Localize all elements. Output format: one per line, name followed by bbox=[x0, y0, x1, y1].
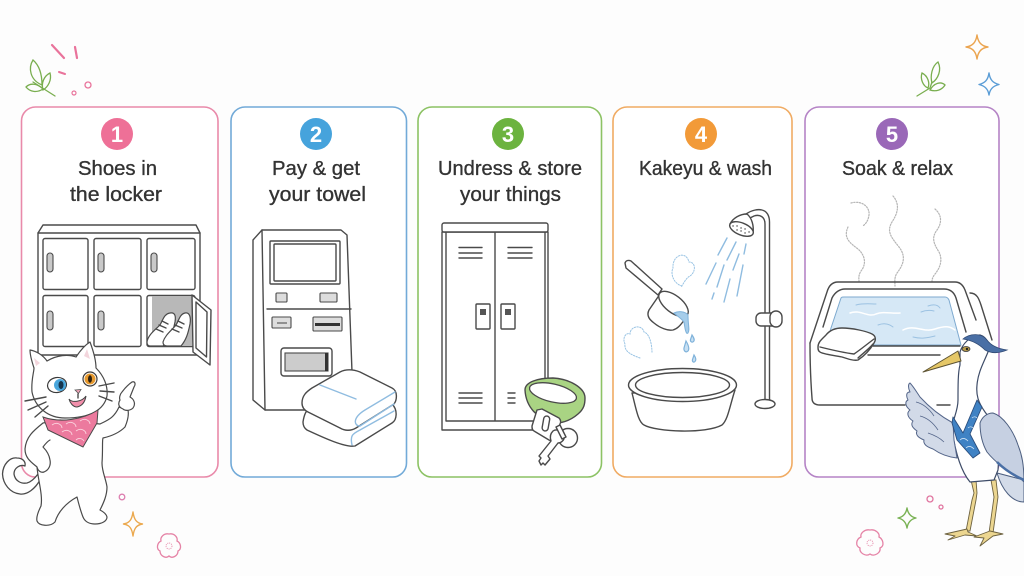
step number 5: 5 bbox=[886, 122, 898, 147]
cat body bbox=[25, 407, 128, 525]
illustration: folded towels bbox=[302, 370, 396, 446]
decoration: pink blossom right bbox=[857, 530, 883, 555]
towel on tub bbox=[818, 328, 875, 360]
heading: pay and get your towel: Pay & get bbox=[272, 157, 360, 180]
step number 5 bbox=[876, 118, 908, 150]
heron body and neck bbox=[952, 335, 998, 482]
heron feet bbox=[945, 529, 1003, 546]
illustration: wristband key bbox=[525, 378, 585, 465]
step number 2: 2 bbox=[310, 122, 322, 147]
illustration: clothes locker bbox=[442, 223, 548, 430]
shoes bbox=[147, 313, 190, 346]
panel 5: soak and relax bbox=[805, 107, 999, 477]
step number 3: 3 bbox=[502, 122, 514, 147]
heading: kakeyu and wash: Kakeyu & wash bbox=[639, 157, 772, 180]
open locker door bbox=[192, 295, 211, 365]
step number 4 bbox=[685, 118, 717, 150]
cat pointing paw bbox=[119, 382, 135, 410]
decoration: pink blossom left bbox=[157, 534, 181, 557]
illustration: wash basin bbox=[628, 368, 736, 431]
steam bbox=[846, 196, 941, 286]
heading: pay and get your towel bbox=[269, 157, 366, 206]
illustration: water ladle bbox=[625, 260, 693, 333]
panel 2: pay and get your towel bbox=[231, 107, 406, 477]
heron left wing bbox=[906, 383, 957, 458]
heading: soak and relax: Soak & relax bbox=[842, 157, 954, 180]
illustration: bathtub bbox=[810, 282, 992, 405]
panel 1: shoes in the locker bbox=[22, 107, 218, 477]
heron right wing bbox=[980, 413, 1024, 482]
heron crest bbox=[963, 335, 1007, 353]
step number 4: 4 bbox=[695, 122, 708, 147]
heading: shoes in the locker bbox=[70, 157, 162, 206]
illustration: shoe lockers bbox=[38, 225, 211, 365]
heron beak bbox=[923, 351, 961, 372]
cat eyes bbox=[46, 372, 97, 394]
decoration: blue sparkle bbox=[979, 73, 999, 95]
decoration: bottom-right dots bbox=[927, 496, 943, 509]
panel 3: undress and store your things bbox=[418, 107, 602, 477]
step number 1: 1 bbox=[111, 122, 123, 147]
heading: pay and get your towel: your towel bbox=[269, 183, 366, 206]
cat head bbox=[30, 342, 107, 418]
heading: shoes in the locker: the locker bbox=[70, 183, 162, 206]
bandana bbox=[43, 410, 98, 447]
decoration: top-left pink sparks bbox=[52, 45, 91, 95]
cat mouth bbox=[69, 390, 86, 407]
decoration: top-right leaf sprig bbox=[917, 62, 945, 96]
step number 2 bbox=[300, 118, 332, 150]
heading: shoes in the locker: Shoes in bbox=[78, 157, 157, 180]
water drops bbox=[684, 335, 696, 362]
heron left leg bbox=[966, 480, 977, 531]
heading: undress and store your things bbox=[438, 157, 582, 206]
heron eye bbox=[962, 346, 970, 352]
heron right leg bbox=[989, 480, 998, 533]
heron tail feathers bbox=[997, 473, 1024, 502]
cat left arm paw bbox=[37, 440, 50, 472]
heron scarf bbox=[952, 400, 982, 458]
decoration: orange sparkle bbox=[966, 35, 988, 59]
decoration: yellow sparkle bbox=[124, 512, 142, 536]
decoration: green sparkle bbox=[898, 508, 916, 528]
steam clouds bbox=[624, 255, 694, 358]
decoration: top-left leaf sprig bbox=[26, 60, 55, 96]
character: white cat with bandana bbox=[2, 342, 135, 525]
illustration: ticket machine bbox=[253, 230, 352, 410]
illustration: shower bbox=[706, 210, 782, 408]
step number 1 bbox=[101, 118, 133, 150]
cat tail bbox=[2, 458, 40, 494]
heading: undress and store your things: your things bbox=[460, 183, 561, 206]
panel 4: kakeyu and wash bbox=[613, 107, 792, 477]
cat whiskers bbox=[25, 383, 114, 417]
step number 3 bbox=[492, 118, 524, 150]
heading: undress and store your things: Undress & store bbox=[438, 157, 582, 180]
character: heron with blue scarf bbox=[906, 335, 1024, 546]
decoration: bottom-left dot bbox=[119, 494, 125, 500]
